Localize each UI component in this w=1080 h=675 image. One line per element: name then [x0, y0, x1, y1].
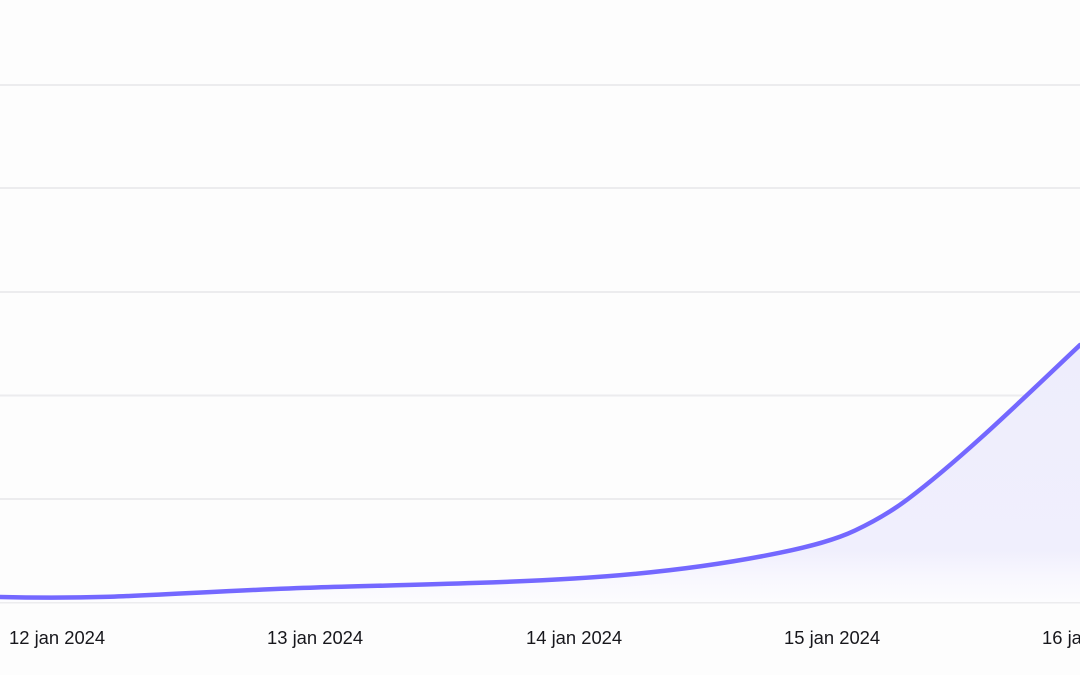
- area fill: [0, 345, 1080, 602]
- x-axis labels: 15 jan 2024: [784, 627, 880, 648]
- x-axis labels: 13 jan 2024: [267, 627, 363, 648]
- x-axis labels: 12 jan 2024: [9, 627, 105, 648]
- trend line: [0, 345, 1080, 598]
- x-axis labels: 14 jan 2024: [526, 627, 622, 648]
- x-axis labels: [9, 627, 1080, 648]
